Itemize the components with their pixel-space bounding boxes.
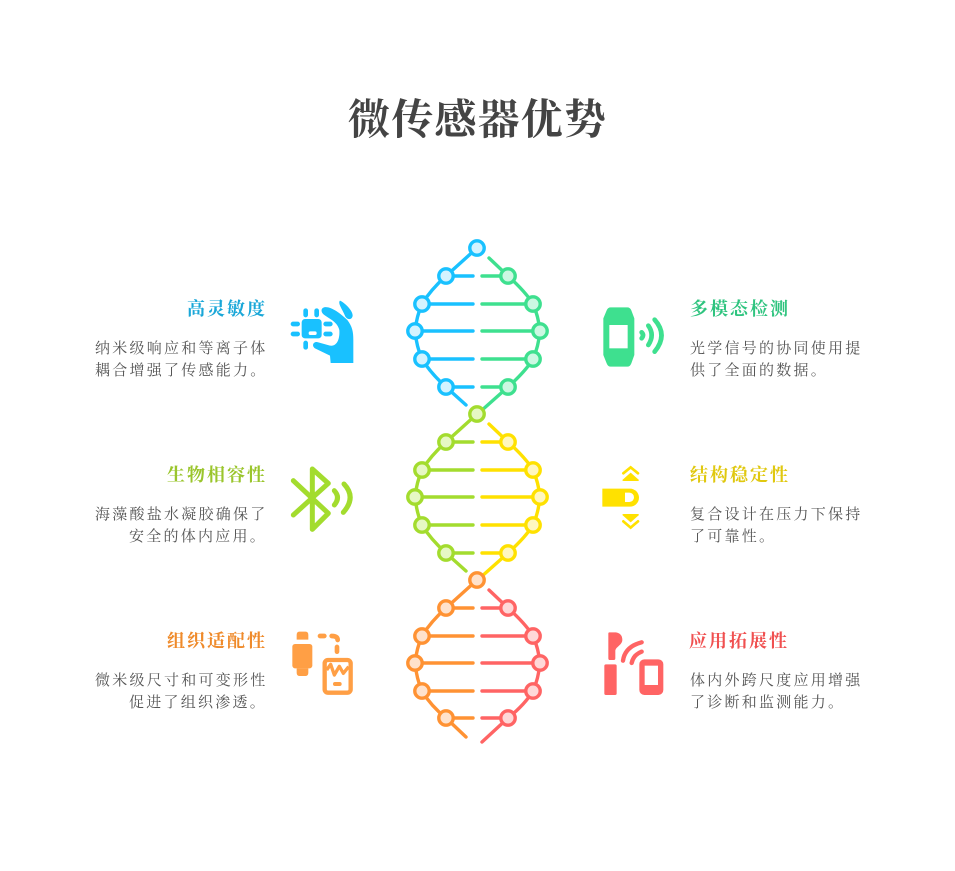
panel: structural stability [602,465,863,545]
text block: structural stability: 了可靠性。 [690,527,776,545]
text block: tissue adaptability: 微米级尺寸和可变形性 [95,672,268,689]
text block: tissue adaptability [95,672,268,711]
panel: high sensitivity [95,298,353,379]
heading: structural stability: 结构稳定性 [690,465,790,485]
helix segment: orange strand [408,573,484,737]
heading: high sensitivity: 高灵敏度 [187,298,267,319]
icon: hand holding chip [293,301,353,363]
icon: device and phone signal [604,632,663,695]
icon: stable capsule [602,467,639,528]
panel: tissue adaptability [95,630,351,711]
helix segment: yellow strand [481,424,547,577]
text block: high sensitivity [95,339,268,379]
text block: application scalability: 了诊断和监测能力。 [690,693,845,711]
text block: multimodal detection [690,339,863,379]
icon: watch and phone [292,632,351,693]
heading: biocompatibility: 生物相容性 [167,464,267,485]
helix segment: green strand [481,258,547,411]
heading: application scalability: 应用拓展性 [689,631,789,651]
heading: multimodal detection: 多模态检测 [690,299,790,319]
text block: biocompatibility [95,505,268,545]
text block: structural stability: 复合设计在压力下保持 [690,506,863,523]
DNA helix [408,241,547,742]
text block: multimodal detection: 供了全面的数据。 [690,361,828,379]
helix segment: red strand [482,590,547,742]
text block: multimodal detection: 光学信号的协同使用提 [690,339,863,357]
text block: application scalability [690,671,863,711]
panel: application scalability [604,631,863,711]
text block: tissue adaptability: 促进了组织渗透。 [129,694,267,711]
text block: high sensitivity: 纳米级响应和等离子体 [95,339,268,357]
text block: biocompatibility: 安全的体内应用。 [129,528,267,545]
text block: structural stability [690,506,863,545]
icon: wristband signal [603,307,661,367]
heading: tissue adaptability: 组织适配性 [167,630,267,651]
text block: high sensitivity: 耦合增强了传感能力。 [95,361,268,379]
panel: multimodal detection [603,299,863,379]
panel: biocompatibility [95,464,350,545]
text block: application scalability: 体内外跨尺度应用增强 [690,671,863,689]
title: 微传感器优势 [348,97,607,144]
icon: bluetooth signal [293,469,350,529]
helix segment: blue strand [408,241,484,405]
helix segment: lime strand [408,407,484,571]
text block: biocompatibility: 海藻酸盐水凝胶确保了 [95,505,268,523]
